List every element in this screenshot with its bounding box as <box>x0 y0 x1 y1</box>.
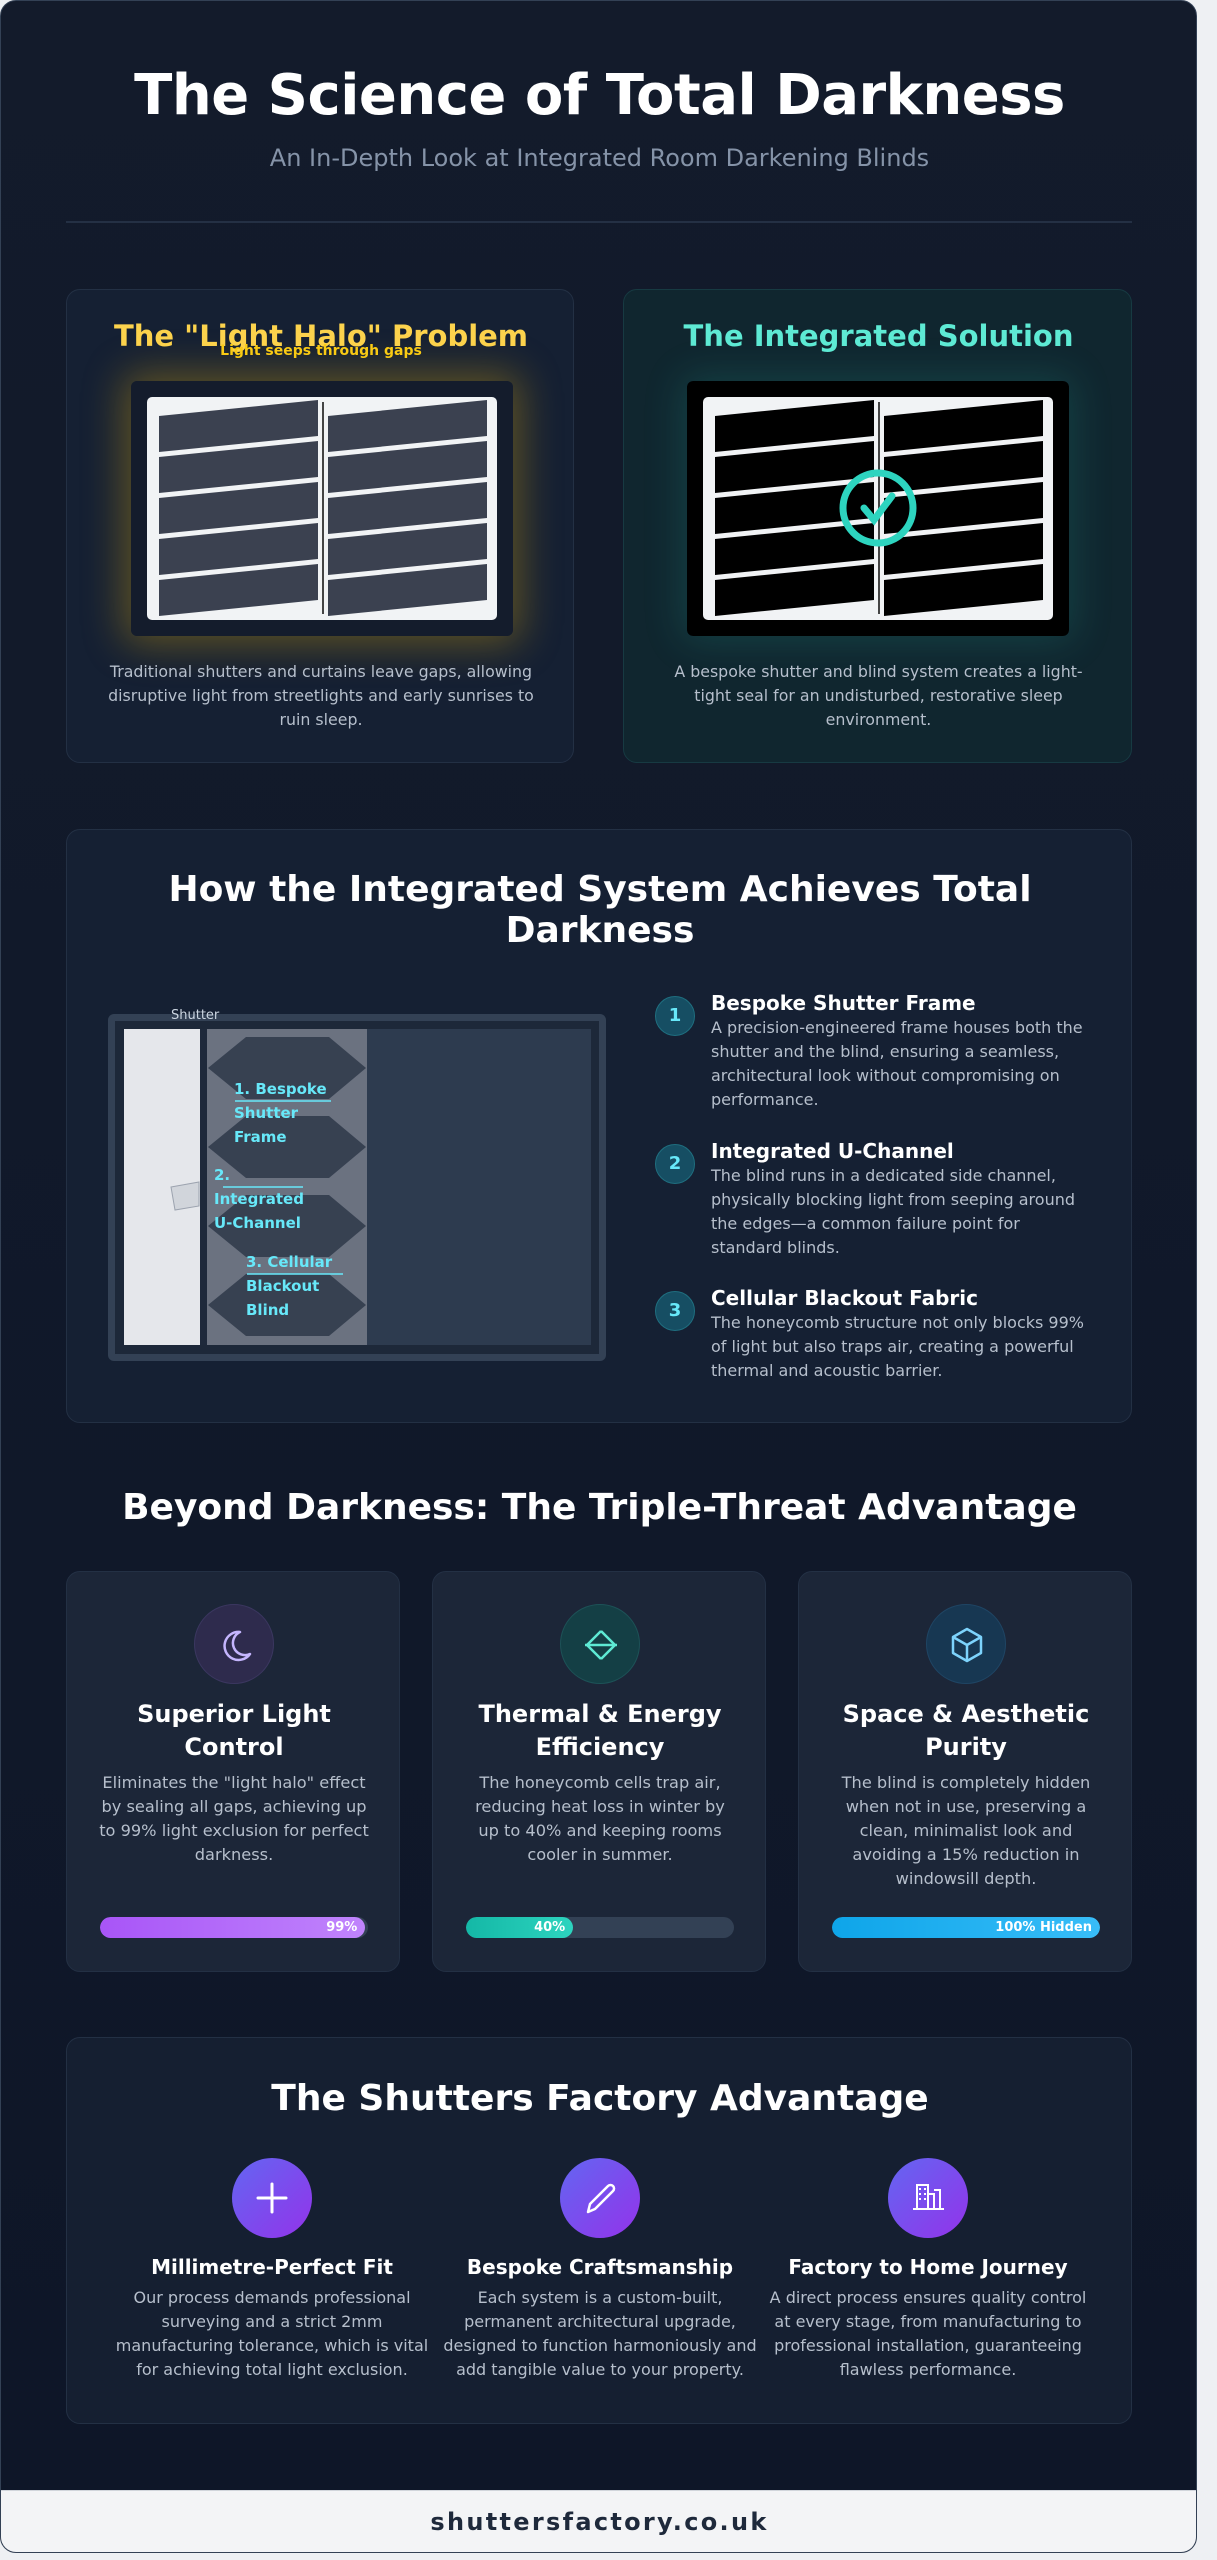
diagram: cross-section <box>108 1008 606 1361</box>
item: millimetre-perfect fit: manufacturing tolerance, which is vital <box>116 2336 428 2355</box>
text: clean, minimalist look and <box>860 1821 1072 1840</box>
item: factory to home journey: at every stage, from manufacturing to <box>774 2312 1082 2331</box>
card: space & aesthetic <box>798 1571 1132 1972</box>
item: bespoke craftsmanship: add tangible value to your property. <box>456 2360 744 2379</box>
footer: shuttersfactory.co.uk <box>430 2508 769 2536</box>
label: 3 cellular blackout blind: 3. Cellular <box>246 1253 332 1271</box>
icon: number 2 <box>655 1144 695 1184</box>
text: step 1: Bespoke Shutter Frame <box>711 991 976 1015</box>
text: step 2: physically blocking light from seeping around <box>711 1190 1075 1209</box>
icon: pencil <box>560 2158 640 2238</box>
icon: number 3 <box>655 1291 695 1331</box>
icon: arrows <box>560 1604 640 1684</box>
bar: 40% <box>466 1917 734 1938</box>
label: 2 integrated u-channel: Integrated <box>214 1190 304 1208</box>
icon: plus <box>232 2158 312 2238</box>
label: 1 bespoke shutter frame: Frame <box>234 1128 287 1146</box>
text: step 2: Integrated U-Channel <box>711 1139 954 1163</box>
step 3 <box>655 1286 1084 1380</box>
icon: moon <box>194 1604 274 1684</box>
icon: building <box>888 2158 968 2238</box>
label: shutter: Shutter <box>171 1008 219 1023</box>
text: problem description: ruin sleep. <box>279 710 363 729</box>
text <box>842 1773 1090 1888</box>
text: step 1 <box>711 991 1083 1109</box>
text: step 3: thermal and acoustic barrier. <box>711 1361 942 1380</box>
label: 1 bespoke shutter frame: 1. Bespoke <box>234 1080 327 1098</box>
title <box>843 1700 1089 1761</box>
text: up to 40% and keeping rooms <box>478 1821 722 1840</box>
text: solution description: A bespoke shutter and blind system creates a light- <box>674 662 1083 681</box>
text: cooler in summer. <box>527 1845 673 1864</box>
text: problem description <box>108 662 534 729</box>
label: 2 integrated u-channel <box>214 1166 304 1232</box>
text: step 1: shutter and the blind, ensuring a seamless, <box>711 1042 1059 1061</box>
text: step 2: standard blinds. <box>711 1238 840 1257</box>
label: 3 cellular blackout blind: Blind <box>246 1301 289 1319</box>
item: millimetre-perfect fit: surveying and a strict 2mm <box>162 2312 382 2331</box>
panel: integrated solution <box>623 289 1132 763</box>
text <box>99 1773 369 1864</box>
item: millimetre-perfect fit: Our process demands professional <box>133 2288 411 2307</box>
text: The honeycomb cells trap air, <box>479 1773 721 1792</box>
bar: 99% <box>100 1917 368 1938</box>
item: millimetre-perfect fit: for achieving total light exclusion. <box>136 2360 408 2379</box>
item: factory to home journey: flawless performance. <box>840 2360 1016 2379</box>
title: Control <box>184 1733 284 1761</box>
footer <box>1 2490 1198 2554</box>
title: Space & Aesthetic <box>843 1700 1089 1728</box>
title <box>478 1700 722 1761</box>
text: step 1: A precision-engineered frame houses both the <box>711 1018 1083 1037</box>
icon: sealed window with check <box>687 381 1069 636</box>
card: superior light control <box>66 1571 400 1972</box>
text: step 3 <box>710 1286 1084 1380</box>
text: to 99% light exclusion for perfect <box>99 1821 369 1840</box>
heading: how it works: How the Integrated System Achieves Total <box>168 869 1032 910</box>
item: factory to home journey: Factory to Home Journey <box>788 2255 1068 2279</box>
bar: 100% hidden: 100% Hidden <box>995 1920 1092 1935</box>
subtitle: An In-Depth Look at Integrated Room Darkening Blinds <box>270 144 929 172</box>
label: 3 cellular blackout blind <box>246 1253 332 1319</box>
panel: shutters factory advantage <box>66 2037 1132 2424</box>
text: step 3: of light but also traps air, creating a powerful <box>711 1337 1074 1356</box>
label: 1 bespoke shutter frame: Shutter <box>234 1104 298 1122</box>
icon: number 2: 2 <box>669 1153 681 1174</box>
text: step 3: The honeycomb structure not only blocks 99% <box>711 1313 1084 1332</box>
icon: number 1: 1 <box>669 1005 681 1026</box>
item: bespoke craftsmanship <box>443 2158 757 2379</box>
text: problem description: disruptive light from streetlights and early sunrises to <box>108 686 534 705</box>
item: bespoke craftsmanship: designed to function harmoniously and <box>443 2336 757 2355</box>
label: 2 integrated u-channel: U-Channel <box>214 1214 301 1232</box>
step 1 <box>655 991 1083 1109</box>
panel: light halo problem <box>66 289 574 763</box>
item: factory to home journey: A direct process ensures quality control <box>770 2288 1086 2307</box>
label: 3 cellular blackout blind: Blackout <box>246 1277 319 1295</box>
icon: leaky window shutter <box>131 381 513 636</box>
text: Eliminates the "light halo" effect <box>102 1773 366 1792</box>
title: Purity <box>925 1733 1007 1761</box>
item: bespoke craftsmanship: Bespoke Craftsmanship <box>467 2255 733 2279</box>
label: 1 bespoke shutter frame <box>234 1080 327 1146</box>
item: factory to home journey <box>770 2158 1086 2379</box>
panel: how the system works <box>66 829 1132 1423</box>
text: by sealing all gaps, achieving up <box>101 1797 367 1816</box>
text: avoiding a 15% reduction in <box>852 1845 1080 1864</box>
title <box>137 1700 331 1761</box>
heading: how it works: Darkness <box>506 910 694 951</box>
item: millimetre-perfect fit: Millimetre-Perfect Fit <box>151 2255 393 2279</box>
text: solution description: environment. <box>826 710 931 729</box>
text: windowsill depth. <box>896 1869 1036 1888</box>
bar: 99%: 99% <box>326 1920 357 1935</box>
title: The Science of Total Darkness <box>134 63 1065 128</box>
bar: 40%: 40% <box>534 1920 565 1935</box>
icon: number 1 <box>655 996 695 1036</box>
title: Thermal & Energy <box>478 1700 722 1728</box>
icon: cube <box>926 1604 1006 1684</box>
item: bespoke craftsmanship: permanent architectural upgrade, <box>464 2312 736 2331</box>
text: The blind is completely hidden <box>842 1773 1090 1792</box>
text: step 1: architectural look without compromising on <box>711 1066 1060 1085</box>
text: reducing heat loss in winter by <box>475 1797 725 1816</box>
title: Efficiency <box>536 1733 664 1761</box>
title: Superior Light <box>137 1700 331 1728</box>
icon: number 3: 3 <box>669 1300 681 1321</box>
item: bespoke craftsmanship: Each system is a custom-built, <box>478 2288 722 2307</box>
card: thermal efficiency <box>432 1571 766 1972</box>
text: darkness. <box>195 1845 273 1864</box>
text: when not in use, preserving a <box>846 1797 1086 1816</box>
text: step 2: the edges—a common failure point for <box>711 1214 1020 1233</box>
text: step 3: Cellular Blackout Fabric <box>711 1286 978 1310</box>
text: solution description: tight seal for an undisturbed, restorative sleep <box>694 686 1063 705</box>
heading: integrated solution: The Integrated Solution <box>684 319 1073 353</box>
label: 2 integrated u-channel: 2. <box>214 1166 230 1184</box>
heading: triple-threat advantage: Beyond Darkness: The Triple-Threat Advantage <box>122 1487 1077 1528</box>
bar: 100% hidden <box>832 1917 1100 1938</box>
text: step 1: performance. <box>711 1090 819 1109</box>
heading: The Shutters Factory Advantage <box>271 2078 929 2119</box>
text: step 2 <box>710 1139 1075 1257</box>
label: light seeps through gaps: Light seeps through gaps <box>220 343 422 359</box>
text: solution description <box>674 662 1083 729</box>
item: millimetre-perfect fit <box>116 2158 428 2379</box>
item: factory to home journey: professional installation, guaranteeing <box>774 2336 1082 2355</box>
step 2 <box>655 1139 1075 1257</box>
heading: how it works <box>168 869 1032 951</box>
text: step 2: The blind runs in a dedicated side channel, <box>711 1166 1056 1185</box>
text: problem description: Traditional shutters and curtains leave gaps, allowing <box>110 662 532 681</box>
heading: light halo problem: The "Light Halo" Problem <box>114 319 528 353</box>
text <box>475 1773 725 1864</box>
